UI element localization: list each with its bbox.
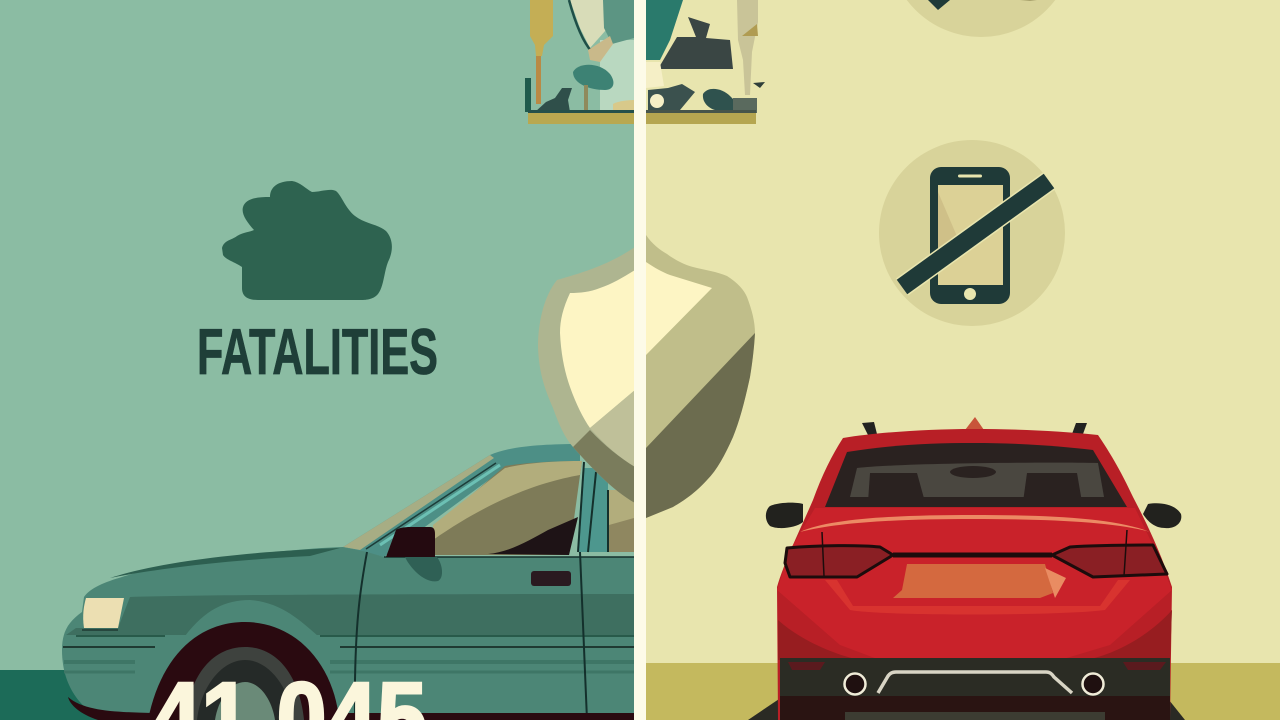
- illustration: green car side view: [62, 444, 634, 720]
- phone: [930, 167, 1010, 304]
- interior: [850, 463, 1104, 497]
- wheel arch hump: [185, 600, 318, 636]
- windscreen pillar: [343, 444, 580, 557]
- window sill: [384, 556, 634, 558]
- centre divider: [634, 0, 646, 720]
- wheel arch: [148, 622, 339, 720]
- ground shadow: [748, 695, 1185, 720]
- car body: [777, 429, 1172, 720]
- right tail light: [1052, 545, 1167, 577]
- icon: shield left half: [538, 247, 635, 503]
- upper trunk: [777, 508, 1172, 660]
- headlight: [83, 598, 124, 628]
- panel: left teal background: [0, 0, 634, 720]
- icon: top partial circle with check: [888, 0, 1074, 37]
- side mirror: [386, 527, 435, 557]
- right exhaust: [1082, 674, 1104, 694]
- slash: [902, 181, 1049, 287]
- car body: [62, 547, 634, 720]
- icon: shield right half: [646, 235, 755, 518]
- lower side shading right: [1085, 610, 1172, 660]
- bumper: [780, 658, 1170, 696]
- pillar teal: [578, 468, 608, 552]
- mid body band: [66, 594, 634, 635]
- door handle: [531, 571, 571, 586]
- license plate: [893, 564, 1053, 598]
- seats: [868, 473, 925, 502]
- bar: [893, 552, 1052, 558]
- left tail light: [785, 546, 893, 577]
- spoiler crease: [800, 515, 1150, 532]
- antennas: [862, 422, 877, 435]
- window glass: [433, 461, 582, 555]
- icon: no phone sign: [879, 140, 1065, 326]
- chrome trim: [878, 672, 1072, 693]
- rear door window: [609, 490, 634, 552]
- lower valance: [780, 696, 1170, 720]
- icon: broken scale right half: [646, 0, 765, 124]
- door seams: [355, 552, 587, 720]
- tyre: [186, 647, 304, 720]
- bottom sill: [68, 697, 152, 720]
- side mirror shadow: [405, 557, 442, 581]
- heading: fatalities: FATALITIES: [197, 315, 438, 388]
- illustration: red car rear view: [748, 417, 1185, 720]
- icon: dark green blob: [222, 181, 392, 300]
- icon: broken scale left half: [525, 0, 634, 124]
- left exhaust: [844, 674, 866, 694]
- rearview mirror: [950, 466, 996, 478]
- left mirror: [766, 503, 803, 528]
- panel: right cream background: [646, 0, 1280, 720]
- lower side shading left: [778, 620, 860, 660]
- reflectors: [788, 662, 825, 670]
- lower stripes: [63, 646, 634, 648]
- roof fin: [965, 417, 984, 430]
- hood shadow: [110, 548, 340, 578]
- trunk lip highlight: [825, 580, 1130, 614]
- right mirror: [1143, 503, 1181, 528]
- rear window: [825, 443, 1127, 507]
